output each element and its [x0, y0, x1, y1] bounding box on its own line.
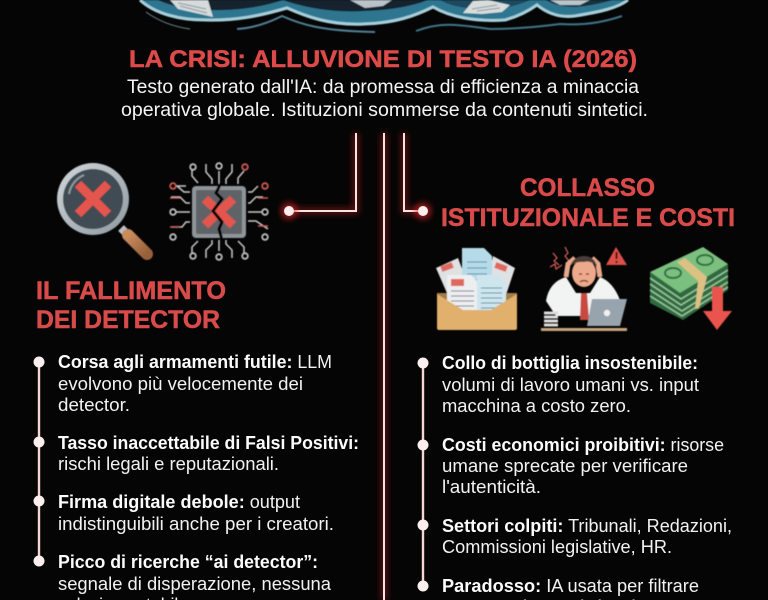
bullet: corsa agli armamenti [58, 352, 332, 415]
icon: broken chip with X [170, 163, 268, 260]
bullet: costi economici [442, 435, 724, 497]
bullet: falsi positivi: Tasso inaccettabile di Falsi Positivi: [58, 433, 359, 453]
banner: wave flood of documents [140, 0, 628, 32]
bullet: picco di ricerche: segnale di disperazione, nessuna [58, 574, 332, 594]
bullet: costi economici: umane sprecate per verificare [442, 456, 688, 476]
panel: detector failure [34, 277, 359, 600]
bullet: collo di bottiglia: Collo di bottiglia insostenibile: [442, 353, 698, 373]
panel: institutional collapse [418, 174, 735, 600]
icon: stressed worker with laptop [541, 247, 627, 331]
bullet: firma digitale: indistinguibili anche per i creatori. [58, 514, 334, 534]
bullet: corsa agli armamenti: Corsa agli armamenti futile: LLM [58, 352, 332, 372]
bullet: picco di ricerche [58, 552, 332, 600]
connector lines [281, 133, 431, 600]
bullet: corsa agli armamenti: detector. [58, 395, 130, 415]
timeline: right [418, 358, 428, 592]
timeline: left [34, 356, 44, 566]
intro text [121, 76, 648, 121]
title: LA CRISI: ALLUVIONE DI TESTO IA (2026) [129, 46, 637, 73]
bullet: settori colpiti: Commissioni legislative, HR. [442, 537, 672, 557]
bullet: paradosso: Paradosso: IA usata per filtrare [442, 576, 699, 596]
bullet: settori colpiti: Settori colpiti: Tribunali, Redazioni, [442, 516, 732, 536]
icon: magnifying glass with X [57, 163, 147, 254]
bullet: settori colpiti [442, 516, 732, 557]
bullet: collo di bottiglia: volumi di lavoro umani vs. input [442, 375, 699, 395]
bullet: corsa agli armamenti: evolvono più velocemente dei [58, 374, 303, 394]
heading: collasso istituzionale e costi [441, 174, 735, 232]
heading: il fallimento dei detector: IL FALLIMENTO [36, 277, 226, 305]
heading: collasso istituzionale e costi: COLLASSO [520, 174, 655, 202]
bullet: costi economici: l'autenticità. [442, 477, 541, 497]
heading: il fallimento dei detector: DEI DETECTOR [36, 306, 220, 334]
bullet: firma digitale [58, 492, 334, 534]
heading: il fallimento dei detector [36, 277, 226, 334]
icon: overflowing document tray [436, 248, 517, 330]
intro text: operativa globale. Istituzioni sommerse da contenuti sintetici. [121, 99, 648, 121]
bullet: costi economici: Costi economici proibitivi: risorse [442, 435, 724, 455]
bullet: firma digitale: Firma digitale debole: output [58, 492, 300, 512]
intro text: Testo generato dall'IA: da promessa di efficienza a minaccia [127, 76, 639, 98]
heading: collasso istituzionale e costi: ISTITUZIONALE E COSTI [441, 204, 735, 232]
bullet: collo di bottiglia [442, 353, 699, 416]
bullet: collo di bottiglia: macchina a costo zero. [442, 396, 631, 416]
bullet: falsi positivi: rischi legali e reputazionali. [58, 454, 279, 474]
paper sheets [170, 0, 590, 17]
icon: money stack with down arrow [650, 247, 732, 330]
bullet: picco di ricerche: Picco di ricerche “ai detector”: [58, 552, 318, 572]
bullet: falsi positivi [58, 433, 359, 474]
